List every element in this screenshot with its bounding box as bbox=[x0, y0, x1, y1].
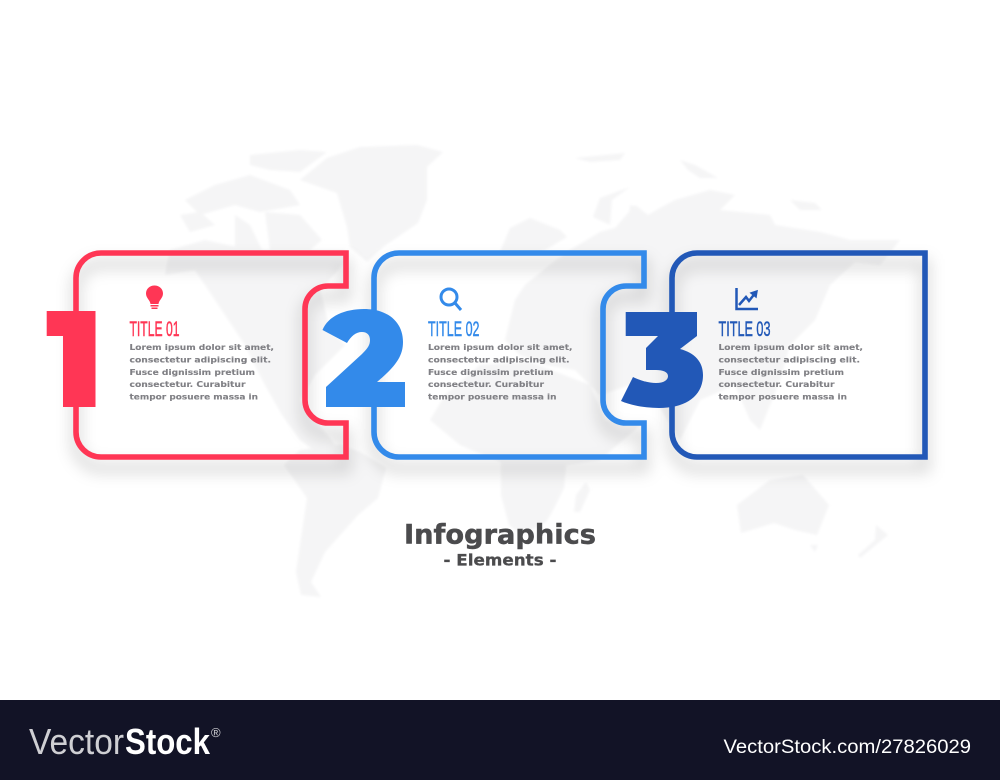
footer bar: ® bbox=[211, 725, 221, 740]
number 2 bbox=[322, 309, 405, 407]
body text 2: tempor posuere massa in bbox=[428, 392, 557, 402]
body text 3 bbox=[718, 343, 863, 402]
icon: light bulb bbox=[146, 286, 163, 309]
heading: infographics: Infographics bbox=[404, 520, 596, 550]
body text 1: Fusce dignissim pretium bbox=[130, 368, 255, 377]
footer id: VectorStock.com/27826029 bbox=[724, 737, 971, 758]
world map bbox=[165, 145, 900, 597]
body text 2: Lorem ipsum dolor sit amet, bbox=[428, 343, 572, 352]
body text 3: tempor posuere massa in bbox=[718, 392, 847, 402]
body text 1: consectetur adipiscing elit. bbox=[130, 356, 271, 364]
frame 2 outline bbox=[374, 253, 644, 457]
title 02: TITLE 02 bbox=[428, 318, 480, 341]
body text 1 bbox=[130, 343, 274, 402]
footer bar bbox=[0, 700, 1000, 780]
body text 3: consectetur adipiscing elit. bbox=[718, 356, 860, 364]
number 3 bbox=[621, 312, 703, 408]
title 01: TITLE 01 bbox=[130, 318, 180, 341]
title 03: TITLE 03 bbox=[718, 318, 770, 341]
heading bbox=[404, 520, 596, 570]
body text 2 bbox=[428, 343, 572, 402]
body text 3: Lorem ipsum dolor sit amet, bbox=[718, 343, 863, 352]
panel: step 2 bbox=[322, 253, 644, 457]
footer bar: Stock bbox=[125, 721, 211, 762]
body text 1: Lorem ipsum dolor sit amet, bbox=[130, 343, 274, 352]
icon: magnifier bbox=[441, 289, 461, 310]
frame shadows bbox=[76, 264, 925, 468]
body text 3: Fusce dignissim pretium bbox=[718, 368, 844, 377]
body text 2: consectetur adipiscing elit. bbox=[428, 356, 570, 364]
body text 3: consectetur. Curabitur bbox=[718, 380, 835, 389]
body text 1: consectetur. Curabitur bbox=[130, 380, 246, 389]
subheading: elements: - Elements - bbox=[444, 551, 556, 570]
body text 2: consectetur. Curabitur bbox=[428, 380, 544, 389]
footer logo: Vector bbox=[29, 721, 124, 762]
frame 3 outline bbox=[672, 253, 925, 457]
body text 2: Fusce dignissim pretium bbox=[428, 368, 554, 377]
icon: growth chart bbox=[736, 288, 758, 309]
body text 1: tempor posuere massa in bbox=[130, 392, 258, 402]
number 1 bbox=[47, 311, 96, 407]
panel: step 3 bbox=[621, 253, 925, 457]
panel: step 1 bbox=[47, 253, 346, 457]
frame 1 outline bbox=[76, 253, 346, 457]
